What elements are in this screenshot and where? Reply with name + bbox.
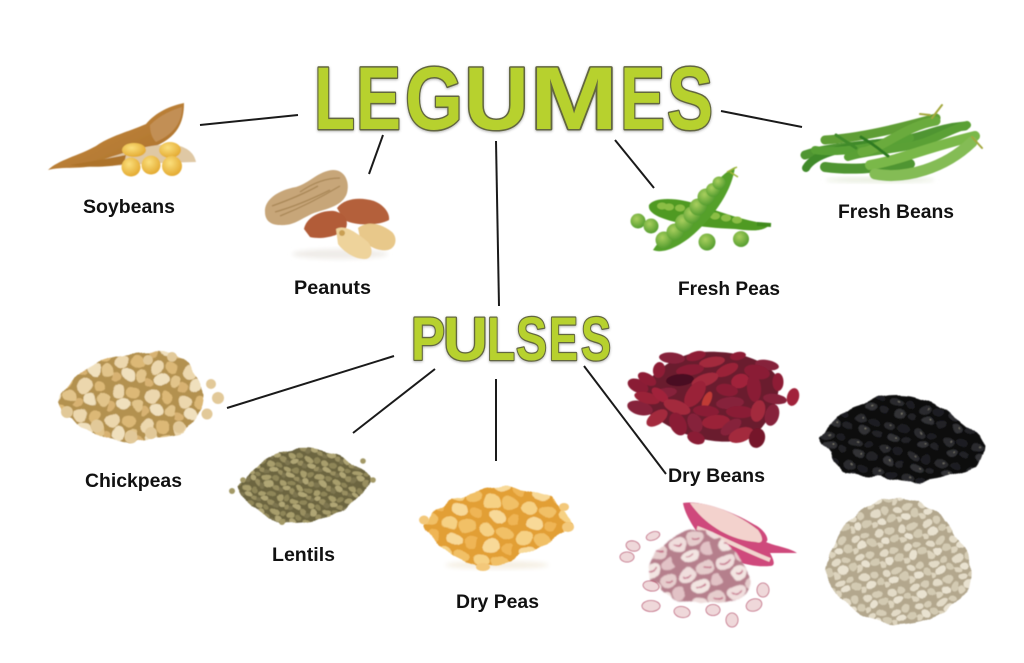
icon: kidney beans	[625, 349, 801, 450]
connector lines from LEGUMES	[200, 111, 802, 306]
label: Lentils: Lentils	[272, 545, 335, 566]
heading: PULSES: L	[487, 305, 515, 373]
title: LEGUMES: S	[667, 48, 713, 148]
label: Peanuts: Peanuts	[294, 278, 371, 299]
heading: PULSES: S	[581, 305, 611, 373]
label: Soybeans: Soybeans	[83, 197, 175, 218]
icon: lentils	[229, 449, 376, 525]
title: LEGUMES: U	[464, 48, 529, 148]
title: LEGUMES: G	[405, 48, 463, 148]
label: Fresh Beans: Fresh Beans	[838, 202, 954, 223]
label: Fresh Peas: Fresh Peas	[678, 279, 780, 300]
icon: borlotti beans	[620, 502, 797, 627]
icon: black beans	[820, 395, 985, 483]
icon: white beans	[826, 498, 972, 625]
icon: chickpeas	[58, 352, 224, 444]
title: LEGUMES: E	[356, 48, 401, 148]
heading: PULSES: E	[549, 305, 578, 373]
icon: peanuts	[265, 170, 395, 259]
title: LEGUMES: E	[620, 48, 665, 148]
icon: fresh beans	[805, 105, 982, 182]
label: Dry Peas: Dry Peas	[456, 592, 539, 613]
heading: PULSES: P	[411, 305, 445, 373]
heading: PULSES: U	[443, 305, 488, 373]
connector lines from PULSES	[227, 356, 666, 474]
label: Dry Beans: Dry Beans	[668, 466, 765, 487]
label: Chickpeas: Chickpeas	[85, 471, 182, 492]
title: LEGUMES: M	[530, 48, 618, 148]
heading: PULSES: S	[516, 305, 547, 373]
icon: dry peas	[419, 488, 574, 571]
icon: fresh peas	[630, 167, 771, 251]
icon: soybeans	[48, 103, 196, 176]
title: LEGUMES: L	[314, 48, 355, 148]
